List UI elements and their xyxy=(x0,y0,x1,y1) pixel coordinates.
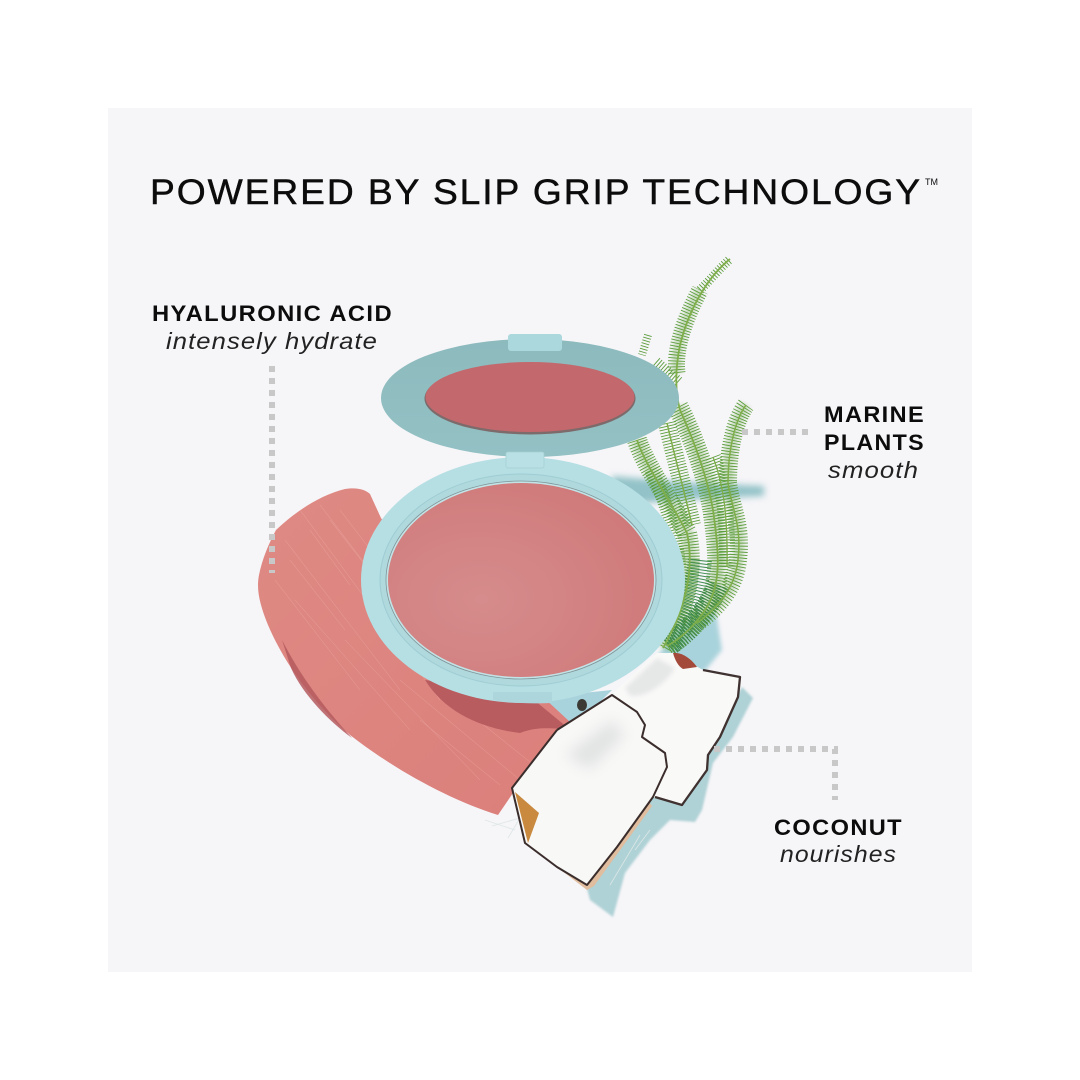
lid xyxy=(381,334,679,457)
plant needles xyxy=(637,260,746,648)
shadow: horizontal seaweed shadow xyxy=(612,476,764,506)
connector: coconut xyxy=(714,749,835,800)
rind xyxy=(512,695,667,885)
plant haze xyxy=(637,290,746,648)
lid mirror xyxy=(426,362,634,432)
lid tab xyxy=(508,334,562,351)
callout: hyaluronic acid: HYALURONIC ACID xyxy=(152,301,393,326)
coconut fibers xyxy=(485,818,650,885)
front clasp xyxy=(493,692,552,703)
callout: coconut: nourishes xyxy=(780,841,897,867)
back shade xyxy=(625,658,675,696)
icon: coconut xyxy=(485,653,740,890)
hinge xyxy=(506,452,544,468)
connector: marine plants xyxy=(742,429,808,435)
back skin xyxy=(673,653,697,669)
title: POWERED BY SLIP GRIP TECHNOLOGY xyxy=(150,173,922,212)
swatch: fold shadow xyxy=(282,640,352,738)
callout: marine plants xyxy=(824,402,925,483)
outer husk xyxy=(557,802,652,890)
panel: background xyxy=(108,108,972,972)
nick xyxy=(577,699,587,711)
callout: hyaluronic acid: intensely hydrate xyxy=(166,328,378,354)
shadow: coconut cast xyxy=(586,687,753,917)
base inner ring xyxy=(380,474,662,686)
plant stems xyxy=(637,259,746,648)
shadow: under compact and coconut xyxy=(655,612,722,690)
lid mirror rim xyxy=(424,362,636,434)
back rind xyxy=(655,670,740,805)
coconut front piece xyxy=(512,695,667,890)
callout: marine plants: PLANTS xyxy=(824,430,925,455)
icon: marine plant xyxy=(637,259,746,648)
callout: coconut xyxy=(774,815,903,867)
coconut back piece xyxy=(577,653,740,805)
callout: marine plants: MARINE xyxy=(824,402,925,427)
compact xyxy=(361,334,685,703)
lid ring xyxy=(381,339,679,457)
swatch: blush smear xyxy=(258,488,580,815)
callout: hyaluronic acid xyxy=(152,301,393,354)
base ring xyxy=(361,457,685,703)
peel xyxy=(515,792,539,843)
title: TM xyxy=(925,177,938,187)
swatch: highlight streaks xyxy=(275,505,540,785)
blush pan xyxy=(388,483,654,677)
callout: coconut: COCONUT xyxy=(774,815,903,840)
connector: hyaluronic acid xyxy=(269,366,275,573)
callout: marine plants: smooth xyxy=(828,457,919,483)
flesh shade xyxy=(565,720,625,770)
shadow: compact on swatch xyxy=(425,680,568,733)
shadow: compact teal wedge xyxy=(543,690,612,722)
base pan rim xyxy=(386,481,656,679)
